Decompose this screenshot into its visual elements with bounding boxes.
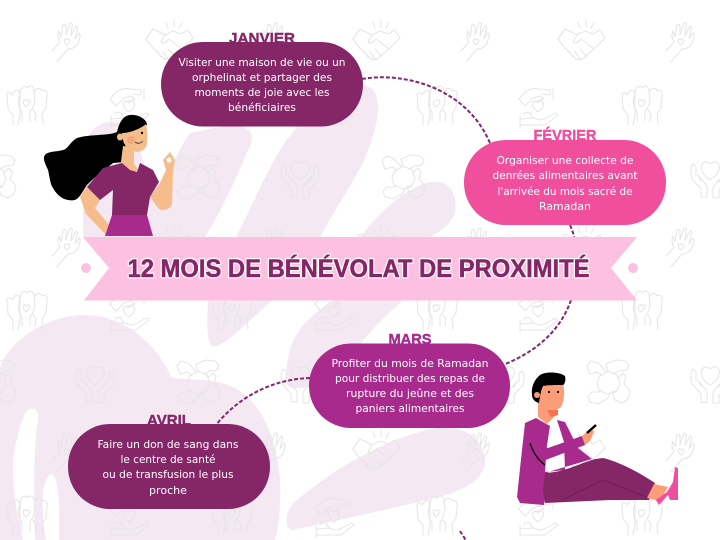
card: février — [464, 140, 666, 225]
month label: mars: MARS — [388, 331, 432, 348]
card: janvier: Visiter une maison de vie ou un — [178, 57, 346, 69]
month label: février: FÉVRIER — [534, 127, 597, 144]
background blobs — [0, 85, 485, 540]
white slits in lower left blob — [13, 409, 59, 540]
illustration: seated man with phone — [517, 372, 678, 505]
month label: avril: AVRIL — [147, 412, 191, 429]
card: janvier: bénéficiaires — [228, 102, 296, 114]
dashed timeline — [216, 77, 575, 540]
title: 12 MOIS DE BÉNÉVOLAT DE PROXIMITÉ — [128, 254, 590, 283]
card: avril: proche — [149, 485, 187, 497]
banner dot left — [81, 263, 91, 273]
card: février: l'arrivée du mois sacré de — [498, 186, 632, 198]
card: avril — [68, 424, 270, 509]
card: avril: Faire un don de sang dans — [98, 439, 238, 451]
card: janvier: moments de joie avec les — [194, 87, 330, 99]
card: janvier: orphelinat et partager des — [192, 72, 332, 84]
title halo: 12 MOIS DE BÉNÉVOLAT DE PROXIMITÉ — [128, 254, 590, 283]
card: janvier — [161, 42, 363, 126]
month label: janvier: JANVIER — [229, 30, 295, 47]
card: mars: rupture du jeûne et des — [346, 388, 474, 400]
illustration: woman with long hair — [44, 115, 175, 236]
card: février: Organiser une collecte de — [496, 155, 634, 167]
card: mars: pour distribuer des repas de — [335, 373, 485, 385]
card: février: denrées alimentaires avant — [492, 170, 638, 182]
card: mars: paniers alimentaires — [356, 403, 464, 415]
card: mars — [309, 344, 510, 428]
card: avril: le centre de santé — [120, 454, 216, 466]
title banner — [81, 237, 638, 300]
card: mars: Profiter du mois de Ramadan — [332, 358, 488, 370]
card: février: Ramadan — [539, 201, 591, 213]
banner dot right — [628, 263, 638, 273]
card: avril: ou de transfusion le plus — [102, 469, 234, 481]
